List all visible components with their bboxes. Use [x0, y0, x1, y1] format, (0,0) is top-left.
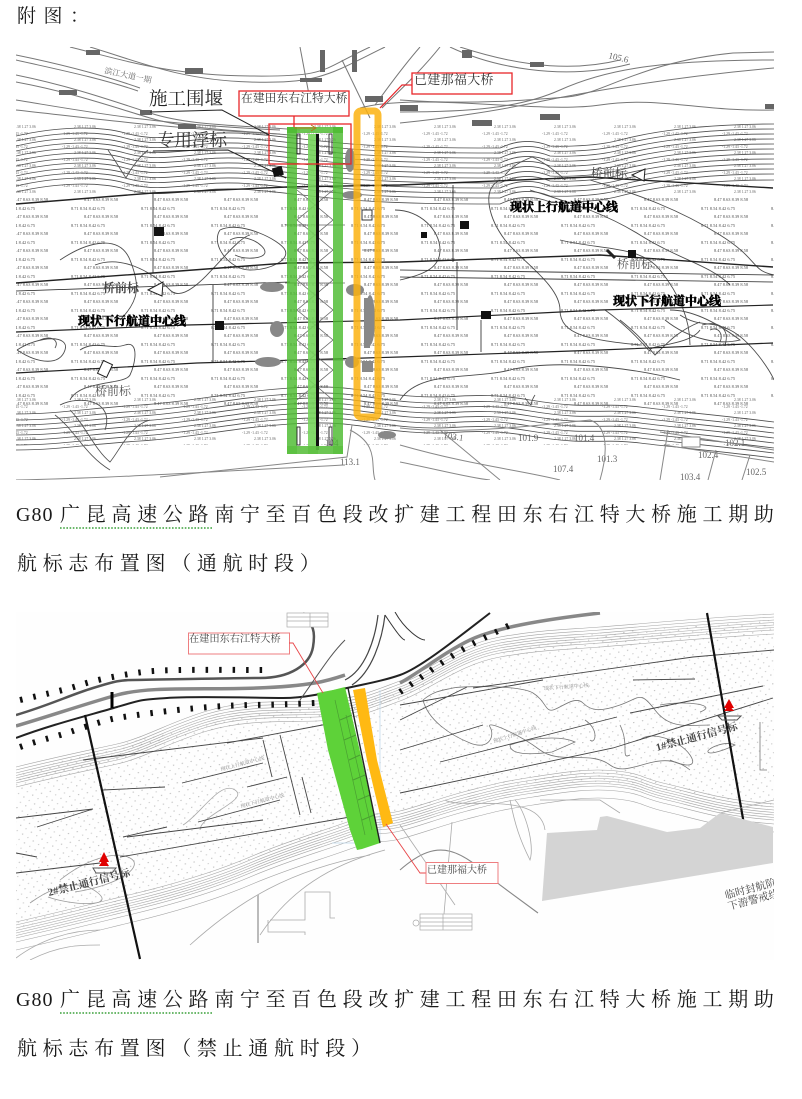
spot elevation texture [16, 122, 774, 445]
label: floating buoy: 专用浮标 [157, 130, 227, 150]
label: temporary closure warning line: 临时封航阶段 [723, 873, 788, 902]
small channel notes: 现状上行航道中心线 [492, 724, 537, 745]
bridge footprint outline [332, 690, 380, 843]
caption 2 line 1: G80 [16, 989, 53, 1011]
label: signal 2: 2#禁止通行信号标 [47, 866, 133, 899]
road label: 滨江大道一期 [104, 65, 153, 85]
riverbed shoal contours [30, 687, 767, 904]
bridge structure lines [285, 175, 375, 400]
black bridge edge [348, 688, 380, 843]
roads upper area [16, 47, 774, 136]
thick rule right [707, 613, 749, 853]
callout: bridge under construction [188, 632, 323, 693]
elevation labels: 102.1 [725, 438, 745, 448]
construction bridge highlight [287, 127, 372, 454]
bank contours upper [16, 614, 774, 787]
label: temporary closure warning line: 下游警戒线 [726, 887, 781, 913]
small channel notes [220, 682, 589, 810]
label: cofferdam [149, 89, 269, 135]
bridge inner marks [362, 298, 373, 372]
label: signal 1: 1#禁止通行信号标 [654, 719, 740, 754]
bank contours lower [16, 770, 774, 950]
caption 1 line 2: 航标志布置图（通航时段） [17, 553, 325, 575]
spell-check underline 1 [60, 527, 212, 529]
existing bridge highlight [353, 688, 393, 827]
elevation labels: 101.3 [597, 454, 618, 464]
elevation labels: 113.1 [340, 457, 360, 467]
elevation labels: 103.1 [443, 430, 464, 443]
callout: existing bridge: 已建那福大桥 [414, 72, 494, 87]
label: cofferdam: 施工围堰 [149, 89, 223, 110]
label: downstream channel centreline left: 现状下行航道中心线 [78, 313, 186, 328]
callout: existing bridge [380, 72, 512, 108]
elevation labels: 104 [325, 438, 339, 448]
anchors and symbols [154, 221, 636, 330]
elevation labels: 102.4 [698, 450, 719, 460]
label: front mark left upper [103, 280, 163, 296]
callout: cofferdam zone [269, 116, 351, 164]
road upper [16, 612, 600, 747]
map: no-navigation period layout [16, 612, 788, 960]
hatched area [542, 813, 773, 901]
label: front mark right lower: 桥前标 [617, 256, 654, 271]
caption 1 line 1: 广昆高速公路南宁至百色段改扩建工程田东右江特大桥施工期助 [60, 504, 780, 526]
label: front mark left lower [95, 361, 132, 398]
small channel notes: 现状上行航道中心线 [220, 755, 265, 773]
lower left land [16, 800, 774, 960]
caption 1 line 1: G80 [16, 504, 53, 526]
callout: existing bridge: 已建那福大桥 [427, 863, 487, 876]
existing bridge highlight [357, 111, 378, 417]
thick rule left [85, 715, 140, 959]
callout: bridge under construction [239, 91, 349, 116]
signal mark 1 [718, 699, 741, 720]
table bottom [413, 914, 472, 930]
bridge truss detail [335, 700, 374, 835]
navigation channel lines [16, 177, 773, 373]
elevation labels [325, 50, 767, 482]
label: temporary closure warning line [723, 873, 788, 913]
elevation labels: 107.4 [553, 464, 574, 474]
label: front mark left lower: 桥前标 [95, 383, 132, 398]
bridge pier details [297, 134, 372, 445]
label: floating buoy [153, 130, 286, 178]
caption 2 line 2: 航标志布置图（禁止通航时段） [17, 1038, 377, 1060]
callout: existing bridge [386, 824, 498, 884]
label: downstream channel centreline right: 现状下行航道中心线 [613, 293, 721, 308]
signal mark 2 [93, 852, 116, 873]
elevation labels: 105.6 [608, 50, 630, 65]
label: front mark right upper [591, 165, 645, 181]
callout: bridge under construction: 在建田东右江特大桥 [241, 91, 348, 105]
callout: bridge under construction: 在建田东右江特大桥 [189, 632, 281, 645]
table top [287, 613, 328, 627]
road markers [59, 50, 774, 129]
gray pier clusters [255, 148, 396, 439]
elevation labels: 102.5 [746, 467, 767, 477]
elevation labels: 103.4 [680, 472, 701, 482]
small channel notes: 现状下行航道中心线 [240, 792, 285, 810]
caption 2 line 1: 广昆高速公路南宁至百色段改扩建工程田东右江特大桥施工期助 [60, 989, 780, 1011]
elevation labels: 101.9 [518, 433, 539, 443]
spell-check underline 2 [60, 1012, 212, 1014]
channel lines [16, 650, 774, 873]
river contours [17, 180, 774, 430]
label: upstream channel centreline: 现状上行航道中心线 [510, 199, 618, 214]
label: front mark left upper: 桥前标 [103, 280, 140, 295]
label: front mark right upper: 桥前标 [591, 165, 628, 180]
upper bank contours [16, 124, 774, 204]
heading: 附图： [17, 6, 97, 27]
label: front mark right lower [607, 250, 654, 271]
elevation labels: 101.4 [574, 433, 595, 443]
map: navigable period layout [16, 47, 774, 482]
lower bank contours [16, 387, 774, 470]
small channel notes: 现状下行航道中心线 [544, 682, 589, 692]
arrow [294, 125, 316, 131]
river dot texture [16, 620, 774, 928]
south bank roads [16, 420, 774, 480]
construction bridge highlight [317, 687, 380, 850]
